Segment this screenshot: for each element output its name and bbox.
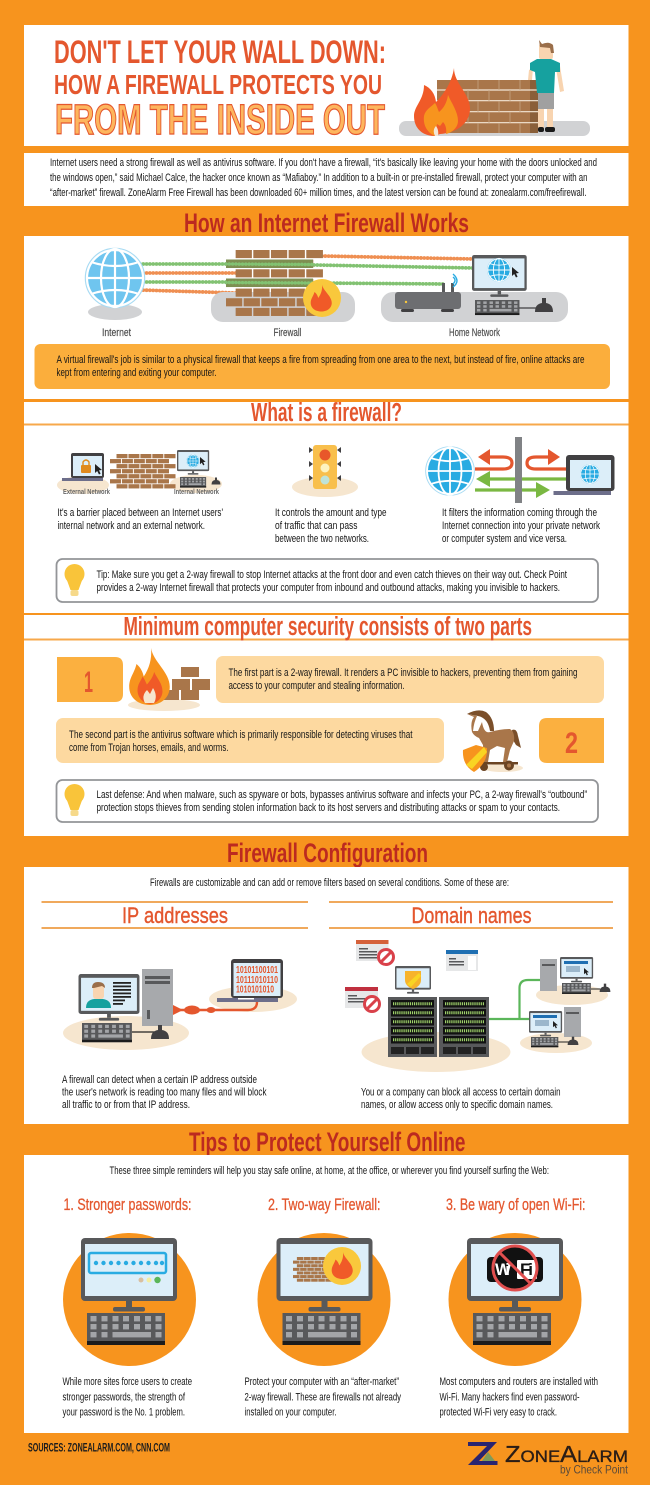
diagram: data flow lines <box>140 256 474 293</box>
column texts: or computer system and vice versa. <box>442 533 567 545</box>
diagram: barrier between networks: External Network <box>63 487 111 496</box>
text box: second part <box>56 718 444 763</box>
tip 3: open wi-fi: 3. Be wary of open Wi-Fi: <box>446 1196 586 1214</box>
heading: tips to protect yourself online: Tips to Protect Yourself Online <box>189 1127 466 1157</box>
text box: first part: access to your computer and stealing information. <box>228 680 404 692</box>
panel: how a firewall works <box>24 236 628 399</box>
column texts: internal network and an external network. <box>58 520 205 532</box>
panel: minimum computer security <box>24 613 628 836</box>
tip 1: stronger passwords: While more sites force users to create <box>62 1376 192 1388</box>
column texts: Internet connection into your private network <box>442 520 600 532</box>
tip 3: open wi-fi: Wi-Fi. Many hackers find even password- <box>440 1392 580 1404</box>
callout: kept from entering and exiting your computer. <box>56 367 216 379</box>
tip 1: stronger passwords: stronger passwords, the strength of <box>62 1392 186 1404</box>
icon: trojan horse and shield <box>463 710 523 772</box>
column heading: IP addresses: IP addresses <box>122 903 228 928</box>
column texts <box>58 507 600 545</box>
text box: second part: come from Trojan horses, emails, and worms. <box>69 742 228 754</box>
number badge 2 <box>539 718 604 763</box>
number badge 1 <box>57 657 123 702</box>
logo: ZoneAlarm: by Check Point <box>560 1462 629 1476</box>
tip 3: open wi-fi <box>440 1196 598 1418</box>
title <box>54 34 386 144</box>
text: domain names <box>361 1086 560 1111</box>
icon: internet globe <box>86 248 144 320</box>
title: FROM THE INSIDE OUT <box>55 96 385 144</box>
callout <box>34 344 610 389</box>
panel: title banner <box>24 25 628 146</box>
number badge 1: 1 <box>84 666 93 699</box>
illustration: fire, brick wall and person <box>399 40 590 136</box>
tip 3: open wi-fi: protected Wi-Fi very easy to crack. <box>440 1406 557 1418</box>
text: domain names: You or a company can block all access to certain domain <box>361 1086 560 1098</box>
title: HOW A FIREWALL PROTECTS YOU <box>54 69 382 100</box>
icon: home network <box>381 255 568 322</box>
illustration: IP address blocking: 1010101010 <box>236 984 274 996</box>
tip 2: two-way firewall <box>244 1196 401 1418</box>
title: DON'T LET YOUR WALL DOWN: <box>54 34 386 70</box>
diagram: barrier between networks: Internal Network <box>174 487 220 496</box>
text box: first part <box>216 656 604 703</box>
illustration: IP address blocking: 10111010110 <box>236 975 278 986</box>
tip callout <box>56 559 598 602</box>
panel: introduction <box>24 153 628 206</box>
panel: firewall configuration <box>24 867 628 1124</box>
column texts: between the two networks. <box>275 533 369 545</box>
text: IP addresses: all traffic to or from that IP address. <box>62 1099 190 1111</box>
text: IP addresses <box>62 1074 267 1111</box>
panel: what is a firewall <box>24 399 628 613</box>
column texts: It filters the information coming through the <box>442 507 597 519</box>
diagram: two-way filter <box>426 437 614 503</box>
tip 3: open wi-fi: Wi <box>495 1260 512 1279</box>
tip 1: stronger passwords <box>62 1196 196 1418</box>
logo: ZoneAlarm: ZONEALARM <box>505 1441 628 1467</box>
labels: Home Network <box>449 327 500 339</box>
tip 2: two-way firewall: 2. Two-way Firewall: <box>268 1196 380 1214</box>
last defense callout <box>56 780 598 822</box>
tip 1: stronger passwords: 1. Stronger passwords: <box>64 1196 192 1214</box>
icon: traffic light <box>292 445 358 497</box>
heading: how an internet firewall works: How an Internet Firewall Works <box>184 208 469 238</box>
column texts: It's a barrier placed between an Internet users' <box>58 507 223 519</box>
illustration: IP address blocking: 10101100101 <box>236 965 278 976</box>
column texts: It controls the amount and type <box>275 507 386 519</box>
intro text: Firewalls are customizable and can add or remove filters based on several conditions. Some of these are: <box>150 877 509 889</box>
text: IP addresses: the user's network is reading too many files and will block <box>62 1086 267 1098</box>
icon: firewall <box>211 250 355 322</box>
labels: Firewall <box>274 327 302 339</box>
tip 2: two-way firewall: 2-way firewall. These are firewalls not already <box>244 1392 401 1404</box>
icon: fire and bricks <box>128 648 210 711</box>
column texts: of traffic that can pass <box>275 520 358 532</box>
diagram: barrier between networks <box>57 450 222 496</box>
text: domain names: names, or allow access only to specific domain names. <box>361 1099 553 1111</box>
heading: What is a firewall? <box>251 399 402 427</box>
labels <box>102 327 500 339</box>
sources: SOURCES: ZONEALARM.COM, CNN.COM <box>28 1442 170 1454</box>
panel: tips <box>24 1155 628 1433</box>
tip 2: two-way firewall: Protect your computer with an “after-market” <box>244 1376 399 1388</box>
labels: Internet <box>102 327 131 339</box>
number badge 2: 2 <box>565 727 578 760</box>
text: IP addresses: A firewall can detect when a certain IP address outside <box>62 1074 257 1086</box>
column heading: domain names: Domain names <box>412 903 532 928</box>
illustration: IP address blocking <box>63 959 297 1050</box>
tip 2: two-way firewall: installed on your computer. <box>244 1406 336 1418</box>
logo: ZoneAlarm <box>468 1441 629 1476</box>
heading: firewall configuration: Firewall Configuration <box>227 838 428 868</box>
tip 1: stronger passwords: your password is the No. 1 problem. <box>62 1406 185 1418</box>
illustration: domain name blocking <box>345 940 610 1072</box>
tip 3: open wi-fi: Fi <box>520 1260 533 1279</box>
text box: second part: The second part is the antivirus software which is primarily responsible for detecting viruses that <box>69 729 412 741</box>
